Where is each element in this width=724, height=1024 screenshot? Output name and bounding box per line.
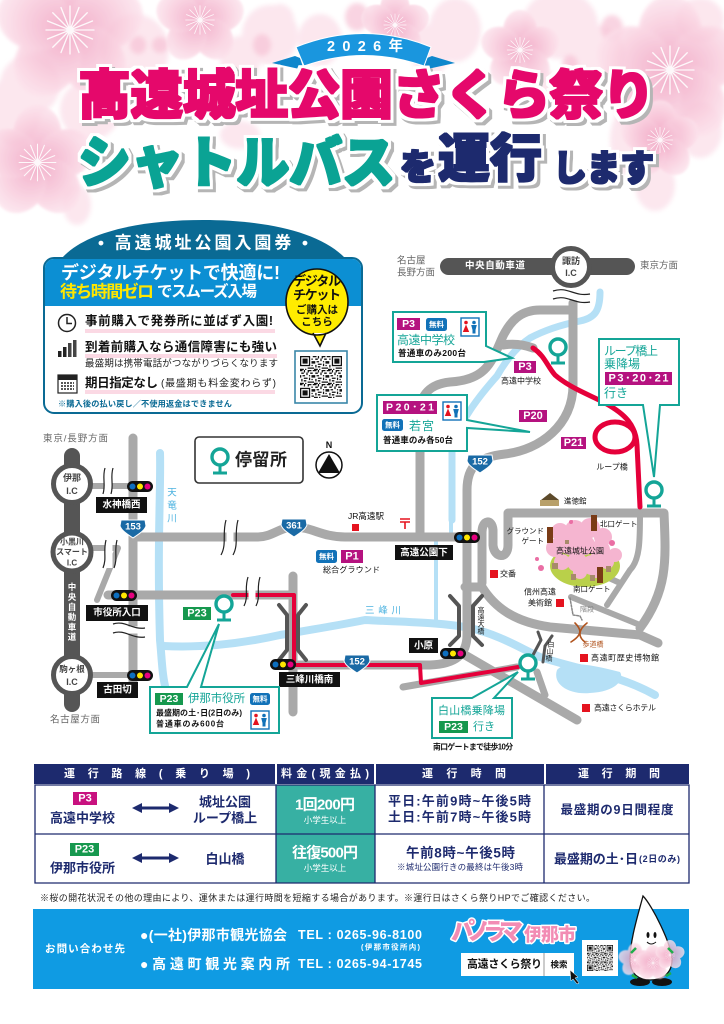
contact rows: TEL : 0265-94-1745	[298, 957, 422, 971]
row: P23 route: 伊那市役所	[50, 860, 115, 876]
route shields: 152	[349, 656, 365, 668]
highway: left	[53, 448, 91, 712]
row: P3 route: 平日:午前9時~午後5時	[388, 794, 531, 808]
icon: stop at city hall	[216, 596, 232, 620]
callout: purchase bubble: こちら	[301, 316, 333, 328]
callout: purchase bubble	[286, 269, 348, 346]
intersection labels: 三峰川橋南	[286, 674, 333, 686]
place labels: north: P3	[518, 361, 532, 373]
place labels: north: 高遠中学校	[501, 376, 541, 386]
river labels	[167, 488, 401, 616]
place labels: park: 橋	[546, 654, 552, 662]
row: P23 route: 白山橋	[205, 852, 245, 866]
place labels: west: JR高遠駅	[348, 511, 384, 521]
icon: signal bars	[58, 340, 76, 357]
panel body	[44, 258, 362, 413]
logo: Panorama Ina: 伊那市	[524, 924, 576, 945]
QR code footer	[582, 940, 618, 976]
place labels: park: 高遠さくらホテル	[594, 702, 656, 712]
row: P3 route: 小学生以上	[304, 815, 347, 825]
place labels: park: 大	[478, 620, 484, 628]
mascot	[617, 896, 686, 986]
highway: top: I.C	[565, 268, 577, 278]
ribbon: 2026年: 2026年	[327, 37, 403, 55]
place labels: park	[478, 493, 659, 712]
ribbon: 2026年	[272, 34, 455, 70]
callout: P3: 無料	[429, 319, 444, 329]
title line 1: 高遠城址公園さくら祭り	[78, 66, 655, 126]
river labels: 川	[167, 514, 177, 524]
highway: left: I.C	[66, 486, 78, 496]
table grid	[35, 785, 689, 883]
row: P23 route: (2日のみ)	[639, 854, 680, 864]
contact rows: ●高遠町観光案内所	[140, 956, 290, 972]
row: P23 route: 最盛期の土･日	[554, 852, 638, 866]
place labels: park: 進徳館	[564, 496, 587, 506]
place labels: park: 北口ゲート	[600, 520, 638, 528]
place labels: park: 山	[546, 648, 554, 656]
table fare cells	[276, 785, 375, 883]
row: P3 route	[50, 792, 674, 826]
ticket headline: でスムーズ入場	[157, 282, 257, 300]
callout: P23 city hall: 無料	[252, 694, 268, 704]
row: P3 route: 城址公園	[199, 794, 251, 810]
title line 2: を	[400, 146, 436, 188]
table header: 料金(現金払)	[281, 766, 369, 780]
title line 2: シャトルバス	[78, 132, 395, 194]
direction labels: top	[397, 254, 678, 278]
highway: top: 諏訪	[562, 255, 580, 266]
traffic signals	[111, 481, 480, 681]
callout: P20 21	[377, 395, 530, 451]
benefit text: (最盛期も料金変わらず)	[161, 376, 276, 390]
table header	[34, 764, 689, 784]
place labels: west	[183, 511, 410, 620]
benefit text	[85, 313, 278, 390]
row: P23 route: 小学生以上	[304, 863, 347, 873]
river labels: 三峰川	[365, 606, 401, 616]
highway: left: 小黒川	[60, 536, 84, 546]
title line 2: 運行	[438, 131, 542, 189]
benefit underlines	[85, 329, 277, 394]
legend: stop: 停留所	[235, 450, 287, 470]
row: P23 route	[50, 843, 680, 876]
direction labels: left	[43, 432, 108, 726]
panel dome heading	[62, 220, 345, 258]
icon: stop at loop bridge	[646, 482, 662, 506]
callout: purchase bubble: チケット	[293, 288, 341, 302]
callout: P23 city hall: 伊那市役所	[188, 691, 246, 705]
castle park	[535, 515, 622, 587]
contact rows: TEL : 0265-96-8100	[298, 928, 422, 942]
callout: P23 city hall: 最盛期の土･日(2日のみ)	[156, 708, 242, 718]
row: P23 route: P23	[75, 844, 94, 856]
highway: left: 央	[68, 592, 77, 602]
map: roads	[85, 303, 665, 720]
callout: P3	[393, 312, 512, 362]
highway: left: スマート	[56, 548, 88, 556]
map: shuttle routes red	[233, 348, 640, 683]
place labels: park: 美術館	[528, 598, 552, 608]
background: cherry blossoms	[0, 0, 724, 225]
route shields	[120, 455, 493, 673]
contact rows: ●(一社)伊那市観光協会	[140, 927, 287, 943]
direction labels: top: 長野方面	[397, 266, 435, 278]
callout: Shiroyama bridge	[432, 672, 518, 752]
river labels: 天	[167, 488, 177, 498]
callout: purchase bubble: ご購入は	[296, 303, 338, 316]
place labels: park: グラウンド	[506, 526, 544, 536]
place labels: park: 信州高遠	[524, 586, 556, 596]
benefit text: 事前購入で発券所に並ばず入園!	[85, 313, 273, 328]
intersection labels: 水神橋西	[102, 498, 141, 510]
intersection labels: 小原	[414, 640, 433, 652]
place labels: north: P21	[564, 437, 583, 449]
highway: top	[440, 248, 635, 286]
place labels: park: 高	[478, 606, 484, 614]
map: road break marks	[103, 290, 590, 637]
callout: loop bridge: 行き	[604, 386, 628, 400]
icon: calendar	[58, 375, 77, 393]
direction labels: top: 名古屋	[397, 254, 426, 266]
place labels: west: P1	[345, 550, 359, 562]
highway: top: 中央自動車道	[465, 260, 525, 272]
callout: P20 21: 若宮	[409, 418, 434, 433]
callout: loop bridge: ループ橋上	[604, 344, 658, 358]
place labels: west: 無料	[319, 551, 334, 561]
compass	[316, 440, 342, 478]
callout: P3: 高遠中学校	[397, 332, 455, 347]
panel: contact: お問い合わせ先	[45, 942, 126, 955]
benefit text: 最盛期は携帯電話がつながりづらくなります	[85, 358, 278, 370]
highway: left: 車	[68, 622, 77, 632]
row: P3 route: 土日:午前7時~午後5時	[388, 810, 531, 824]
highway: left: 中	[68, 582, 76, 592]
place labels: park: 高遠町歴史博物館	[591, 652, 659, 662]
logo: Panorama Ina: パノラマ	[451, 918, 523, 946]
callout: purchase bubble: デジタル	[293, 274, 341, 288]
refund note: ※購入後の払い戻し／不使用返金はできません	[58, 398, 232, 408]
callout: P23 city hall: P23	[160, 693, 178, 705]
panel dome heading: • 高遠城址公園入園券 •	[98, 232, 308, 252]
place labels: park: 橋	[478, 626, 484, 636]
QR code	[295, 351, 347, 403]
route shields: 361	[286, 520, 303, 532]
intersection labels	[86, 497, 453, 698]
compass: N	[326, 440, 332, 450]
place labels: west: 総合グラウンド	[323, 564, 380, 574]
search box	[461, 953, 579, 984]
place labels: north	[501, 361, 628, 472]
row: P3 route: 高遠中学校	[50, 810, 115, 826]
footnote: ※桜の開花状況その他の理由により、運休または運行時間を短縮する場合があります。※運行日はさくら祭りHPでご確認ください。	[40, 892, 595, 903]
direction labels: left: 名古屋方面	[50, 714, 100, 726]
row: P23 route: ※城址公園行きの最終は午後3時	[397, 862, 523, 872]
contact rows: (伊那市役所内)	[361, 942, 420, 952]
callout: loop bridge: P3･20･21	[608, 372, 668, 384]
highway: left: 駒ヶ根	[59, 664, 85, 674]
row: P23 route: 往復500円	[292, 844, 358, 862]
ticket headline: デジタルチケットで快適に!	[61, 262, 280, 283]
map: bridges	[279, 596, 587, 662]
panel: ticket	[44, 220, 362, 413]
direction labels: left: 東京/長野方面	[43, 432, 108, 444]
ticket headline	[60, 262, 280, 302]
direction labels: top: 東京方面	[640, 260, 678, 272]
callout: loop bridge	[599, 339, 679, 477]
table header: 運行路線(乗り場)	[64, 766, 250, 780]
logo: Panorama Ina	[451, 918, 576, 946]
callout: Shiroyama bridge: 行き	[473, 720, 495, 733]
place labels: park: ゲート	[522, 536, 544, 546]
row: P3 route: 1回200円	[295, 796, 355, 814]
intersection labels: 市役所入口	[93, 606, 141, 618]
highway: left: 動	[68, 612, 77, 622]
intersection labels: 古田切	[103, 684, 132, 696]
callout: Shiroyama bridge: 白山橋乗降場	[438, 703, 505, 717]
highway: left: 自	[68, 602, 76, 612]
ticket headline: 待ち時間ゼロ	[60, 282, 154, 302]
title line 2	[78, 131, 654, 194]
benefit text: 到着前購入なら通信障害にも強い	[85, 339, 277, 354]
title line 2: します	[553, 148, 654, 188]
row: P3 route: ループ橋上	[193, 810, 257, 826]
legend: stop	[195, 437, 303, 483]
castle park: 高遠城址公園	[556, 546, 604, 556]
callout: Shiroyama bridge: 南口ゲートまで徒歩10分	[433, 742, 513, 752]
route shields: 152	[472, 456, 488, 468]
river labels: 竜	[167, 500, 177, 512]
highway: left: 道	[68, 632, 77, 642]
callout: P20 21: P20･21	[386, 402, 434, 414]
icon: stop at white mountain bridge	[520, 655, 536, 679]
benefit text: 期日指定なし	[85, 375, 158, 390]
callout: loop bridge: 乗降場	[604, 357, 640, 371]
place labels: park: 南口ゲート	[573, 584, 610, 594]
row: P3 route: 最盛期の9日間程度	[560, 802, 674, 817]
highway: left: I.C	[67, 558, 77, 568]
place labels: north: P20	[523, 410, 543, 422]
contact rows	[140, 927, 422, 972]
map: rivers	[159, 292, 655, 695]
callout: P20 21: 無料	[385, 420, 400, 430]
row: P3 route: P3	[78, 792, 92, 804]
callout: P20 21: 普通車のみ各50台	[383, 435, 453, 445]
callout: P3: P3	[402, 318, 415, 330]
intersection labels: 高遠公園下	[400, 546, 448, 558]
highway: left: I.C	[66, 677, 78, 687]
place labels: west: P23	[187, 608, 207, 620]
panel: contact	[33, 896, 689, 989]
place labels: park: 白	[548, 640, 554, 648]
place labels: north: ループ橋	[596, 462, 628, 472]
route shields: 153	[125, 522, 141, 532]
search box: 検索	[550, 960, 568, 970]
place labels: park: 歩道橋	[582, 640, 604, 648]
place labels: park: 階段	[580, 604, 594, 614]
table header: 運行期間	[578, 766, 660, 780]
icon: stop at P3	[550, 339, 566, 363]
callout: P23 city hall	[150, 624, 279, 733]
row: P23 route: 午前8時~午後5時	[406, 844, 516, 860]
callout: Shiroyama bridge: P23	[444, 721, 463, 733]
icon: gates	[547, 515, 603, 583]
place labels: park: 遠	[478, 612, 484, 622]
search box: 高遠さくら祭り	[467, 956, 542, 970]
table: schedule	[34, 764, 689, 883]
highway: left: 伊那	[63, 472, 81, 483]
place labels: park: 交番	[500, 568, 516, 578]
table header: 運行時間	[422, 766, 506, 780]
callout: P23 city hall: 普通車のみ600台	[156, 718, 224, 728]
callout: P3: 普通車のみ200台	[398, 348, 466, 358]
icon: clock	[58, 314, 76, 332]
